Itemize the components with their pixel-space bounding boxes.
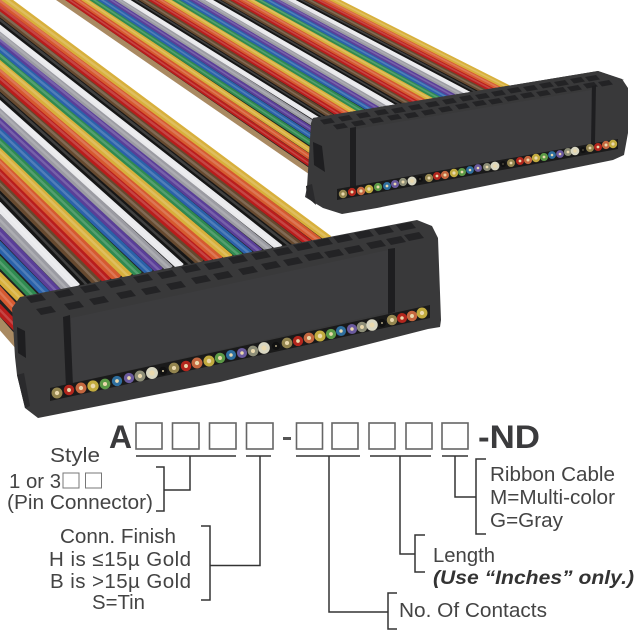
callout: connector finish: S=Tin bbox=[92, 591, 145, 614]
underlines bbox=[136, 455, 468, 457]
ribbon cable: front bbox=[0, 0, 329, 358]
callout: ribbon cable: G=Gray bbox=[490, 509, 564, 532]
contact holes: rear connector bbox=[340, 141, 616, 197]
ribbon cable: rear bbox=[52, 0, 511, 178]
callout: connector finish: Conn. Finish bbox=[60, 525, 176, 548]
callout: connector finish: B is >15µ Gold bbox=[50, 570, 191, 593]
callout: length: Length bbox=[433, 544, 495, 567]
callout: style: 1 or 3 bbox=[9, 470, 61, 493]
part number row: -ND bbox=[478, 419, 540, 455]
callout: connector finish bbox=[49, 456, 260, 614]
callout: style: (Pin Connector) bbox=[7, 491, 153, 514]
callout: number of contacts: No. Of Contacts bbox=[399, 599, 547, 622]
callout: style bbox=[7, 444, 190, 514]
part number row: A bbox=[109, 419, 132, 455]
callout: number of contacts bbox=[329, 456, 547, 629]
callout: ribbon cable: Ribbon Cable bbox=[490, 463, 615, 486]
callout: length bbox=[400, 456, 634, 589]
callout: length: (Use “Inches” only.) bbox=[433, 567, 634, 589]
part number row bbox=[109, 419, 540, 455]
connector: front bbox=[12, 220, 441, 418]
callout: style: Style bbox=[50, 444, 100, 467]
contact holes: front connector bbox=[53, 309, 426, 397]
callout: ribbon cable bbox=[455, 456, 615, 534]
callout: connector finish: H is ≤15µ Gold bbox=[49, 548, 191, 571]
connector: rear bbox=[305, 71, 628, 214]
callout: ribbon cable: M=Multi-color bbox=[490, 486, 615, 509]
